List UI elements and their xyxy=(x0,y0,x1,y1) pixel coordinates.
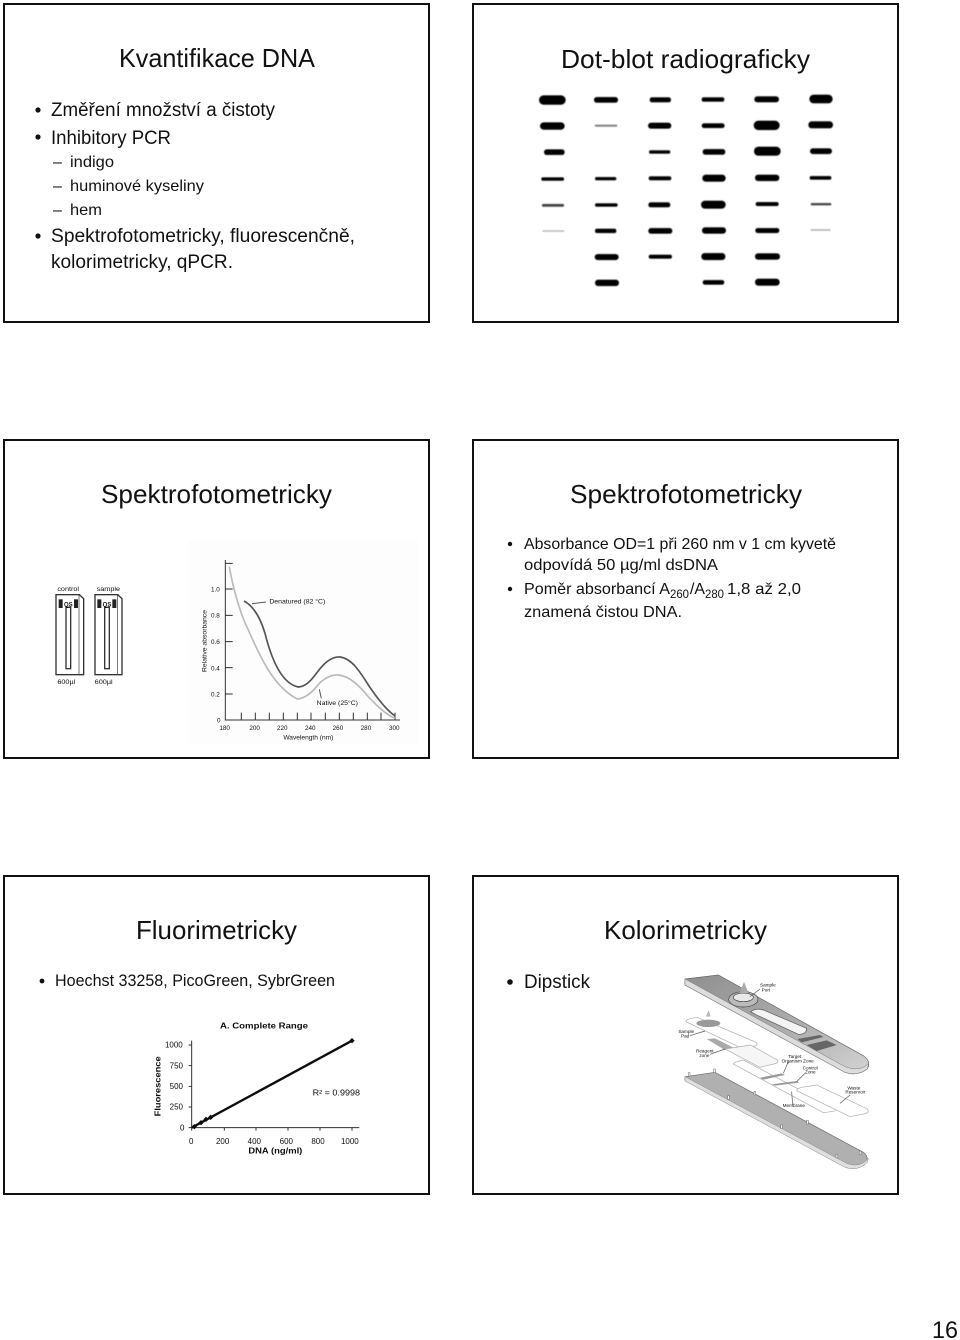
absorbance line chart: 0.2 xyxy=(211,692,220,699)
dipstick exploded diagram: Organism Zone xyxy=(782,1058,814,1063)
fluorescence calibration chart: 200 xyxy=(216,1137,230,1146)
absorbance notes: 1,8 až 2,0 xyxy=(727,581,801,598)
bullet list xyxy=(35,100,355,273)
bullet list: indigo xyxy=(70,154,114,171)
absorbance line chart: 240 xyxy=(305,725,316,732)
absorbance line chart: Relative absorbance xyxy=(201,609,208,672)
heading: Spektrofotometricky: Spektrofotometricky xyxy=(101,479,332,509)
bullet: dyes: Hoechst 33258, PicoGreen, SybrGreen xyxy=(55,971,335,990)
absorbance notes: Poměr absorbancí A xyxy=(524,581,670,598)
heading: Fluorimetricky: Fluorimetricky xyxy=(136,915,297,945)
sample pad xyxy=(686,1017,757,1048)
dipstick exploded diagram: Reservoir xyxy=(845,1090,866,1095)
heading: Dot-blot radiograficky: Dot-blot radiograficky xyxy=(561,44,810,74)
fluorescence calibration chart: 250 xyxy=(170,1103,184,1112)
absorbance line chart: 200 xyxy=(249,725,260,732)
absorbance line chart: Native (25°C) xyxy=(317,699,358,707)
panel: Kvantifikace DNA xyxy=(4,4,429,322)
heading: Spektrofotometricky: Spektrofotometricky xyxy=(570,479,802,509)
cuvettes diagram: QS xyxy=(103,602,112,609)
dipstick exploded diagram: zone xyxy=(699,1053,710,1058)
fluorescence calibration chart: 1000 xyxy=(165,1041,183,1050)
heading: Kolorimetricky: Kolorimetricky xyxy=(604,915,767,945)
bullet list: huminové kyseliny xyxy=(70,178,204,195)
dipstick exploded diagram: Port xyxy=(762,987,771,992)
bottom housing xyxy=(685,1072,867,1166)
dipstick exploded diagram: Reagent xyxy=(696,1048,714,1053)
cuvettes diagram: sample xyxy=(97,586,121,593)
fluorescence calibration chart: 1000 xyxy=(341,1137,359,1146)
absorbance line chart: 0 xyxy=(217,717,221,724)
fluorescence calibration chart: DNA (ng/ml) xyxy=(248,1147,303,1156)
absorbance notes: 260 xyxy=(670,587,689,601)
bullet list: – xyxy=(53,178,62,195)
absorbance line chart: 0.4 xyxy=(211,665,220,672)
absorbance line chart: Wavelength (nm) xyxy=(283,735,333,742)
fluorescence calibration chart: 750 xyxy=(170,1061,184,1070)
bullet list: – xyxy=(53,154,62,171)
top housing xyxy=(685,975,869,1074)
dot-blot bands xyxy=(539,95,833,286)
absorbance line chart: 280 xyxy=(361,725,372,732)
fluorescence calibration chart: 0 xyxy=(189,1137,194,1146)
absorbance line chart: 180 xyxy=(219,725,230,732)
bullet list: Inhibitory PCR xyxy=(51,128,171,149)
dipstick exploded diagram: Waste xyxy=(847,1085,861,1090)
dipstick exploded diagram xyxy=(678,975,869,1169)
absorbance notes: znamená čistou DNA. xyxy=(524,604,682,621)
dipstick exploded diagram: Sample xyxy=(760,983,776,988)
cuvettes diagram: 600µl xyxy=(57,679,75,686)
membrane xyxy=(733,1060,836,1113)
dipstick exploded diagram: Sample xyxy=(678,1029,695,1034)
panel: Dot-blot radiograficky xyxy=(473,4,898,322)
absorbance line chart: 0.6 xyxy=(211,639,220,646)
bullet: Dipstick: Dipstick xyxy=(524,972,590,993)
absorbance notes xyxy=(508,536,836,621)
panel: Spektrofotometricky (chart) xyxy=(4,440,429,758)
absorbance notes: odpovídá 50 µg/ml dsDNA xyxy=(524,557,718,574)
absorbance line chart: Denatured (82 °C) xyxy=(269,598,325,606)
fluorescence calibration chart: R² = 0.9998 xyxy=(313,1089,361,1098)
absorbance line chart: 260 xyxy=(333,725,344,732)
fluorescence calibration chart: 500 xyxy=(170,1082,184,1091)
fluorescence calibration chart: 800 xyxy=(311,1137,325,1146)
fluorescence calibration chart: 400 xyxy=(248,1137,262,1146)
absorbance line chart: 0.8 xyxy=(211,613,220,620)
cuvettes diagram: control xyxy=(57,586,79,593)
bullet list: – xyxy=(53,202,62,219)
fluorescence calibration chart: A. Complete Range xyxy=(220,1021,309,1030)
absorbance notes: Absorbance OD=1 při 260 nm v 1 cm kyvetě xyxy=(524,536,836,553)
absorbance line chart: 1.0 xyxy=(211,586,220,593)
dipstick exploded diagram: Membrane xyxy=(783,1103,805,1108)
fluorescence calibration chart xyxy=(154,1021,361,1156)
cuvettes diagram: 600µl xyxy=(95,679,113,686)
bullet list: Změření množství a čistoty xyxy=(51,100,275,121)
absorbance notes: 280 xyxy=(705,587,724,601)
absorbance line chart: 300 xyxy=(389,725,400,732)
bullet list: Spektrofotometricky, fluorescenčně, xyxy=(51,226,355,247)
bullet list: hem xyxy=(70,202,102,219)
panel: Spektrofotometricky (text) xyxy=(473,440,898,758)
dipstick exploded diagram: Target xyxy=(788,1054,802,1059)
heading: Kvantifikace DNA: Kvantifikace DNA xyxy=(119,43,316,73)
absorbance line chart: 220 xyxy=(277,725,288,732)
panel: Fluorimetricky xyxy=(4,876,429,1194)
absorbance notes: /A xyxy=(690,581,705,598)
bullet list: kolorimetricky, qPCR. xyxy=(51,252,233,273)
cuvettes diagram xyxy=(56,586,122,686)
dipstick exploded diagram: Zone xyxy=(805,1070,816,1075)
cuvettes diagram: QS xyxy=(64,602,73,609)
fluorescence calibration chart: 0 xyxy=(180,1123,185,1132)
waste reservoir xyxy=(797,1085,868,1117)
reagent zone xyxy=(707,1038,735,1050)
absorbance line chart xyxy=(188,540,418,743)
panel: Kolorimetricky xyxy=(473,876,898,1194)
dipstick exploded diagram: Control xyxy=(803,1065,818,1070)
dipstick exploded diagram: Pad xyxy=(681,1034,690,1039)
fluorescence calibration chart: Fluorescence xyxy=(154,1056,163,1116)
fluorescence calibration chart: 600 xyxy=(280,1137,294,1146)
